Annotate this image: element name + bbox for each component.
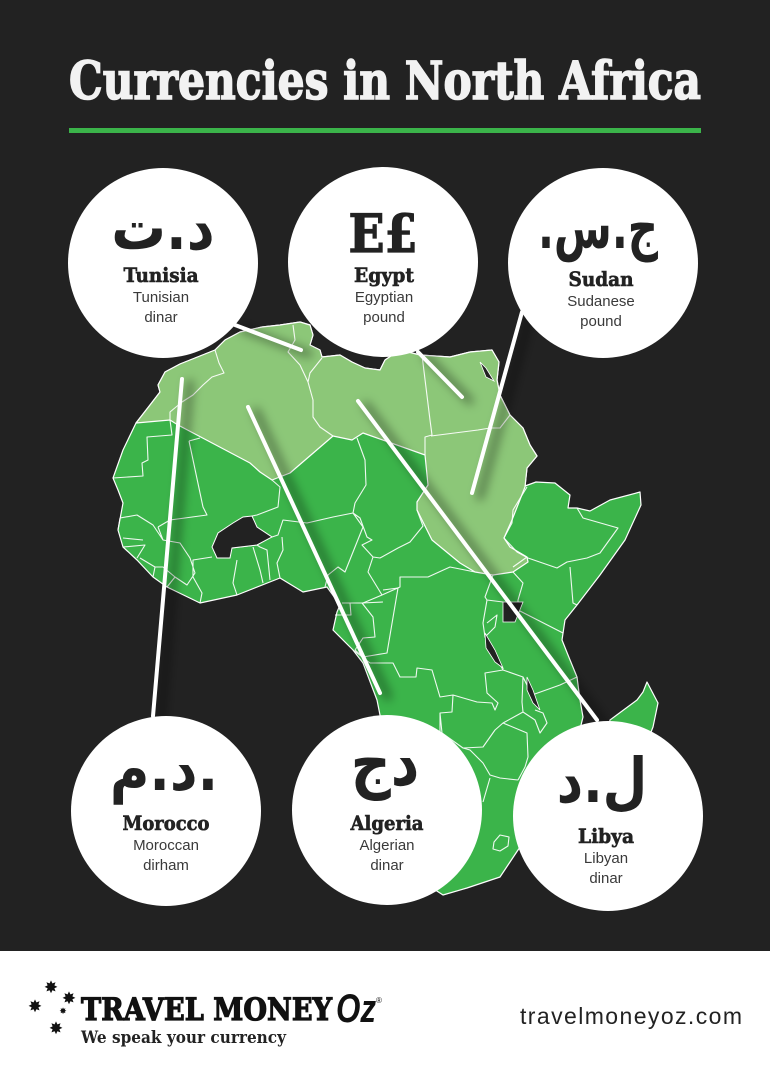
connector lines	[153, 312, 597, 720]
logo: ®	[376, 996, 382, 1005]
callout: Morocco: Morocco	[122, 811, 210, 835]
icon: stars: ✸	[62, 989, 76, 1009]
footer band	[0, 951, 770, 1080]
callout: Sudan	[508, 168, 698, 358]
logo tagline: We speak your currency	[80, 1028, 287, 1048]
callout: Libya: Libyan	[584, 850, 628, 867]
callout: Egypt	[288, 167, 478, 357]
mainland	[113, 322, 641, 895]
callout: Tunisia	[68, 168, 258, 358]
callout: Sudan: pound	[580, 313, 622, 330]
callout: Sudan: ج.س.	[538, 194, 659, 263]
icon: stars: ✸	[49, 1019, 63, 1039]
Lesotho	[493, 835, 509, 851]
callout: Morocco: Moroccan	[133, 837, 199, 854]
logo wordmark: TRAVEL MONEY	[81, 992, 333, 1028]
callout: Tunisia: Tunisian	[133, 289, 189, 306]
callout: Libya: ل.د	[557, 745, 647, 817]
callout: Egypt: Egyptian	[355, 289, 413, 306]
callout: Morocco	[71, 716, 261, 906]
callout: Egypt: Egypt	[354, 263, 415, 287]
map: Africa	[113, 322, 658, 895]
callout: Sudan: Sudan	[568, 267, 634, 291]
callout: Egypt: E£	[348, 204, 418, 265]
title underline	[69, 128, 701, 133]
callout: Algeria	[292, 715, 482, 905]
callout: Libya	[513, 721, 703, 911]
callout: Algeria: dinar	[370, 857, 404, 874]
callout: Tunisia: د.ت	[111, 192, 215, 264]
callout: Algeria: Algeria	[350, 811, 424, 835]
Madagascar	[600, 682, 658, 760]
icon: stars	[28, 978, 76, 1039]
callout: Sudan: Sudanese	[567, 293, 635, 310]
callout: Tunisia: Tunisia	[124, 263, 199, 287]
logo script Oz: Oz	[336, 987, 376, 1031]
lakes and Red Sea	[480, 362, 540, 710]
callout: Libya: Libya	[578, 824, 634, 848]
icon: stars: ✸	[59, 1007, 67, 1017]
icon: stars: ✸	[44, 978, 58, 998]
logo	[28, 978, 382, 1048]
country borders	[170, 325, 510, 455]
icon: stars: ✸	[28, 997, 42, 1017]
website url: travelmoneyoz.com	[520, 1003, 742, 1029]
connector line shadows	[161, 316, 605, 724]
Burkina Faso cut-out	[212, 516, 272, 558]
callout: Tunisia: dinar	[144, 309, 178, 326]
callout: Morocco: dirham	[143, 857, 189, 874]
callout: Egypt: pound	[363, 309, 405, 326]
north africa highlighted	[136, 322, 537, 575]
callout: Algeria: Algerian	[359, 837, 415, 854]
callout: Morocco: .د.م	[110, 735, 218, 805]
callout: Algeria: دج	[351, 726, 419, 801]
callout: Libya: dinar	[589, 870, 623, 887]
